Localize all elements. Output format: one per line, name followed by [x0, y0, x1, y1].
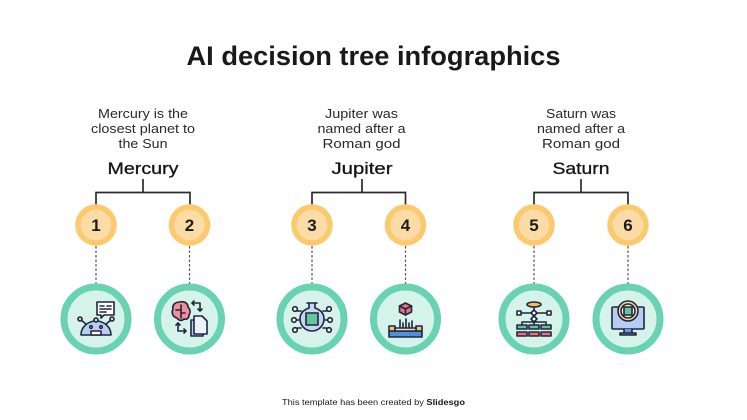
number badge 1	[78, 207, 114, 243]
panel: Jupiter	[280, 106, 438, 351]
dashed connector 5	[533, 246, 535, 284]
footer credit: This template has been created by Slidesgo	[282, 397, 465, 407]
text block: Mercury description: the Sun	[118, 136, 168, 151]
panel: Mercury	[64, 106, 222, 351]
number badge 2: 2	[185, 216, 194, 235]
dashed connector 6	[627, 246, 629, 284]
text block: Jupiter description: named after a	[318, 121, 406, 136]
icon: robot with speech bubble	[64, 287, 128, 351]
icon: brain and document	[158, 287, 222, 351]
number badge 5	[516, 207, 552, 243]
icon: monitor with chip	[596, 287, 660, 351]
number badge 6: 6	[623, 216, 633, 235]
tree connector: Jupiter	[312, 179, 406, 205]
text block: Jupiter description: Jupiter was	[325, 106, 399, 121]
number badge 2	[172, 207, 208, 243]
number badge 6	[610, 207, 646, 243]
text block: Saturn description: Roman god	[542, 136, 620, 151]
tree connector: Saturn	[534, 179, 628, 205]
heading: Jupiter: Jupiter	[332, 160, 393, 178]
number badge 5: 5	[529, 216, 539, 235]
text block: Jupiter description: Roman god	[322, 136, 400, 151]
number badge 1: 1	[91, 216, 101, 235]
heading: Saturn: Saturn	[552, 160, 610, 178]
heading: Mercury: Mercury	[108, 160, 179, 178]
number badge 4	[388, 207, 424, 243]
text block: Saturn description: Saturn was	[546, 106, 617, 121]
dashed connector 2	[188, 246, 190, 284]
dashed connector 1	[95, 246, 97, 284]
dashed connector 3	[311, 246, 313, 284]
text block: Saturn description: named after a	[537, 121, 626, 136]
icon: 3D printer with cube	[374, 287, 438, 351]
tree connector: Mercury	[96, 179, 190, 205]
icon: flowchart	[502, 287, 566, 351]
panel: Saturn	[502, 106, 660, 351]
number badge 3: 3	[307, 216, 317, 235]
text block: Mercury description: Mercury is the	[98, 106, 188, 121]
text block: Mercury description: closest planet to	[91, 121, 195, 136]
title: AI decision tree infographics	[186, 41, 560, 71]
number badge 4: 4	[401, 216, 411, 235]
dashed connector 4	[404, 246, 406, 284]
icon: flask with chip	[280, 287, 344, 351]
number badge 3	[294, 207, 330, 243]
